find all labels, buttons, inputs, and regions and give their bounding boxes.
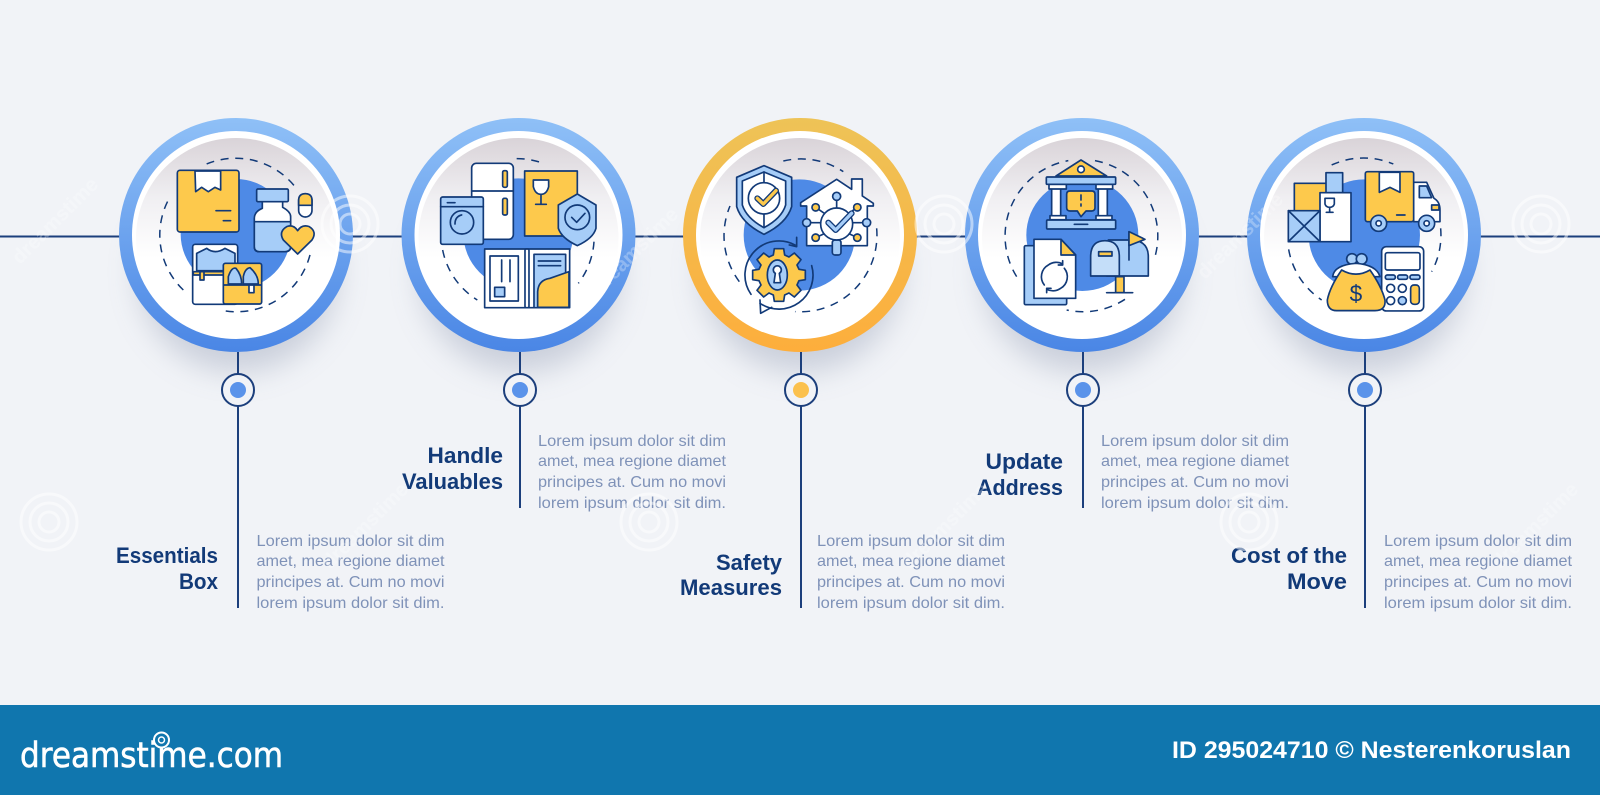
description text: amet, mea regione diamet: [538, 453, 727, 470]
icon: appliances and documents: [441, 159, 596, 308]
description text: amet, mea regione diamet: [1101, 453, 1290, 470]
node marker: [1067, 374, 1099, 406]
icon: bank, document and mailbox: [1005, 160, 1158, 312]
description text: [1101, 433, 1290, 512]
watermark overlay: dreamstime: [588, 204, 683, 299]
icon: boxes, truck, purse and calculator: [1288, 158, 1441, 311]
description text: Lorem ipsum dolor sit dim: [1384, 533, 1572, 550]
description text: lorem ipsum dolor sit dim.: [1384, 595, 1572, 612]
title: Safety Measures: Safety: [716, 550, 783, 575]
description text: [538, 433, 727, 512]
title: Safety Measures: Measures: [680, 575, 782, 600]
description text: [1384, 533, 1573, 612]
node marker: [785, 374, 817, 406]
description text: principes at. Cum no movi: [817, 574, 1005, 591]
panel: essentials box: [116, 118, 445, 612]
image id and author: ID 295024710 © Nesterenkoruslan: [1172, 737, 1571, 764]
description text: principes at. Cum no movi: [1384, 574, 1572, 591]
title: Update Address: [977, 449, 1063, 500]
icon: box, medicine and clothes: [160, 158, 314, 312]
description text: lorem ipsum dolor sit dim.: [538, 495, 726, 512]
node marker: [222, 374, 254, 406]
description text: Lorem ipsum dolor sit dim: [256, 533, 444, 550]
title: Essentials Box: Essentials: [116, 543, 218, 568]
node marker: [504, 374, 536, 406]
watermark overlay: dreamstime: [1193, 189, 1288, 284]
description text: [256, 533, 445, 612]
logo spiral: [154, 732, 169, 748]
title: Essentials Box: Box: [179, 569, 219, 594]
title: Update Address: Address: [977, 475, 1063, 500]
description text: Lorem ipsum dolor sit dim: [1101, 433, 1289, 450]
horizontal timeline line: [0, 236, 1600, 238]
watermark overlay: dreamstime: [318, 479, 413, 574]
description text: lorem ipsum dolor sit dim.: [256, 595, 444, 612]
watermark overlay: dreamstime: [898, 479, 993, 574]
panel: handle valuables: [402, 118, 727, 512]
title: Essentials Box: [116, 543, 219, 594]
footer band: [0, 705, 1600, 795]
description text: principes at. Cum no movi: [1101, 474, 1289, 491]
description text: lorem ipsum dolor sit dim.: [817, 595, 1005, 612]
description text: lorem ipsum dolor sit dim.: [1101, 495, 1289, 512]
title: Cost of the Move: Move: [1287, 569, 1347, 594]
panel: cost of the move: [1231, 118, 1573, 612]
description text: principes at. Cum no movi: [538, 474, 726, 491]
description text: amet, mea regione diamet: [817, 553, 1006, 570]
description text: [817, 533, 1006, 612]
node marker: [1349, 374, 1381, 406]
panel: safety measures: [680, 118, 1006, 612]
icon glyph: dollar sign: $: [1350, 281, 1363, 307]
watermark overlay: dreamstime: [1488, 479, 1583, 574]
title: Handle Valuables: Handle: [428, 443, 503, 468]
title: Update Address: Update: [986, 449, 1063, 474]
panel: update address: [965, 118, 1290, 512]
title: Handle Valuables: Valuables: [402, 469, 503, 494]
logo wordmark: dreamstime.com: [20, 736, 283, 776]
title: Cost of the Move: Cost of the: [1231, 543, 1347, 568]
icon: shield, smart home and gear lock: [724, 159, 877, 313]
description text: Lorem ipsum dolor sit dim: [538, 433, 726, 450]
watermark overlay: [8, 174, 1583, 574]
description text: principes at. Cum no movi: [256, 574, 444, 591]
title: Cost of the Move: [1231, 543, 1347, 594]
description text: Lorem ipsum dolor sit dim: [817, 533, 1005, 550]
title: Handle Valuables: [402, 443, 503, 494]
watermark overlay: dreamstime: [8, 174, 103, 269]
description text: amet, mea regione diamet: [256, 553, 445, 570]
title: Safety Measures: [680, 550, 783, 600]
description text: amet, mea regione diamet: [1384, 553, 1573, 570]
